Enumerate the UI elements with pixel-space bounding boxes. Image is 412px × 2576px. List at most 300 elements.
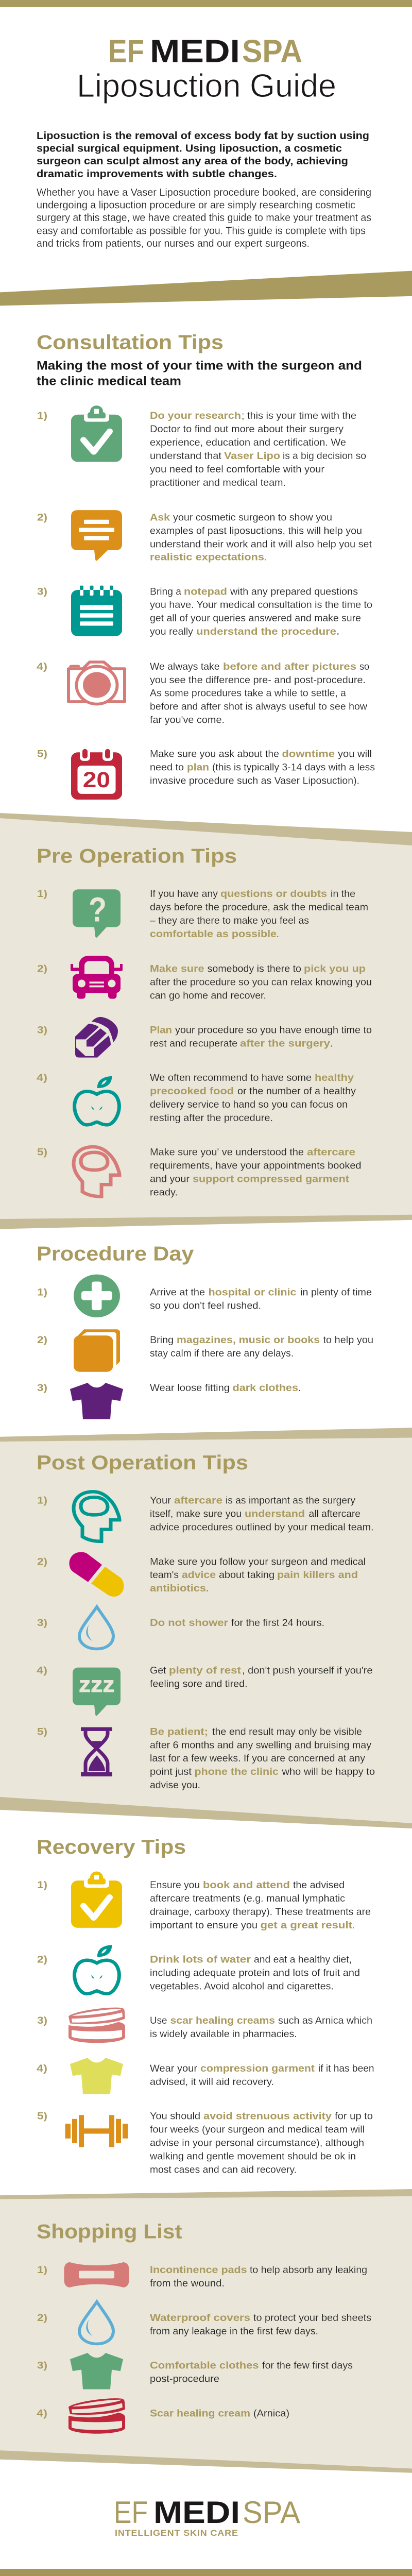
- item 3: dark clothes: [37, 1382, 301, 1419]
- icon: purple t-shirt: [70, 1383, 123, 1419]
- text: you see the difference pre- and post-procedure.: [150, 674, 366, 686]
- text: Get: [150, 1665, 166, 1676]
- logo: EF MediSpa: SPA: [242, 33, 302, 69]
- item 2: pain killers: 2): [37, 1556, 47, 1567]
- text: [150, 1335, 373, 1359]
- text: (this is typically 3-14 days with a less: [212, 762, 375, 773]
- footer logo: SPA: [243, 2495, 300, 2530]
- text: vegetables. Avoid alcohol and cigarettes.: [150, 1981, 334, 1992]
- text: ; this is your time with the: [242, 411, 356, 421]
- text: Make sure you ask about the: [150, 749, 279, 759]
- text: somebody is there to: [207, 963, 301, 975]
- text: [150, 1287, 372, 1311]
- text: [150, 411, 366, 488]
- item 2: ask: 2): [37, 512, 47, 523]
- text: pick you up: [304, 963, 366, 975]
- item 5: be patient: 5): [37, 1726, 47, 1737]
- item 1: book and attend: 1): [37, 1880, 47, 1891]
- icon: pill: [70, 1552, 124, 1597]
- heading: shopping list: Shopping List: [37, 2220, 182, 2243]
- icon: sleep bubble: zzz: [79, 1672, 115, 1697]
- icon: hourglass: [81, 1727, 112, 1776]
- icon: book: [74, 1329, 120, 1372]
- item 4: scar healing cream: 4): [37, 2408, 47, 2419]
- item 1: book and attend: [37, 1871, 371, 1931]
- heading: consultation tips: Consultation Tips: [37, 331, 224, 353]
- text: .: [330, 1038, 333, 1049]
- text: [150, 889, 368, 940]
- top bar: [0, 0, 412, 7]
- icon: red cream jar: [68, 2398, 125, 2434]
- text: post-procedure: [150, 2374, 219, 2384]
- text: Be patient;: [150, 1726, 208, 1737]
- text: get all of your queries answered and make sure: [150, 613, 361, 624]
- text: avoid strenuous activity: [203, 2111, 332, 2122]
- intro: body paragraph: and tricks from patients, our nurses and our expert surgeons.: [37, 238, 310, 249]
- item 2: magazines: 2): [37, 1335, 47, 1346]
- footer logo: MEDI: [153, 2495, 240, 2530]
- heading: procedure day: Procedure Day: [37, 1242, 194, 1265]
- text: [150, 1556, 366, 1594]
- text: about taking: [219, 1570, 274, 1581]
- text: Bring a: [150, 586, 181, 597]
- text: examples of past liposuctions, this will help you: [150, 526, 362, 536]
- intro: bold summary: Liposuction is the removal of excess body fat by suction using: [37, 130, 369, 142]
- text: understand: [245, 1509, 305, 1519]
- text: [150, 2015, 372, 2040]
- text: [150, 1880, 371, 1931]
- item 2: waterproof covers: 2): [37, 2313, 47, 2324]
- text: notepad: [184, 586, 227, 597]
- item 3: scar healing creams: 3): [37, 2015, 47, 2026]
- text: dark clothes: [233, 1382, 298, 1394]
- text: advised, it will aid recovery.: [150, 2077, 274, 2088]
- text: in the: [331, 889, 355, 900]
- text: .: [206, 1583, 209, 1594]
- item 1: questions or doubts: 1): [37, 889, 47, 900]
- text: Waterproof covers: [150, 2313, 250, 2324]
- item 1: incontinence pads: [37, 2262, 367, 2289]
- text: ready.: [150, 1187, 178, 1198]
- text: If you have any: [150, 889, 218, 900]
- text: (Arnica): [253, 2408, 289, 2419]
- slanted band: [0, 1428, 412, 1442]
- text: your cosmetic surgeon to show you: [173, 512, 332, 523]
- text: Make sure: [150, 963, 204, 975]
- icon: dumbbell: [65, 2115, 128, 2147]
- text: As some procedures take a while to settle, a: [150, 688, 346, 699]
- text: Your: [150, 1495, 171, 1506]
- item 4: healthy precooked food: 4): [37, 1073, 47, 1083]
- text: experience, education and certification. We: [150, 437, 346, 448]
- text: practitioner and medical team.: [150, 478, 286, 488]
- text: all aftercare: [309, 1509, 360, 1519]
- tagline: INTELLIGENT SKIN CARE: [115, 2528, 238, 2538]
- text: plenty of rest: [169, 1665, 241, 1676]
- text: drainage, carboxy therapy). These treatments are: [150, 1907, 371, 1918]
- text: Do your research: [150, 411, 241, 421]
- text: [150, 1665, 373, 1689]
- text: Wear your: [150, 2063, 197, 2074]
- text: advice: [182, 1570, 216, 1581]
- item 2: drink lots of water: [37, 1945, 360, 1994]
- text: you need to feel comfortable with your: [150, 464, 324, 475]
- text: Wear loose fitting: [150, 1382, 230, 1394]
- text: before and after shot is always useful to see how: [150, 701, 368, 713]
- item 2: pick you up: [37, 956, 372, 1001]
- panel: post operation tips: [37, 1451, 375, 1791]
- text: after the procedure so you can relax knowing you: [150, 977, 372, 988]
- item 5: aftercare requirements: 5): [37, 1147, 47, 1158]
- item 3: scar healing creams: [37, 2008, 372, 2043]
- text: if it has been: [318, 2063, 374, 2074]
- item 2: ask: [37, 510, 372, 563]
- subheading: Making the most of your time with the surgeon and: [37, 359, 362, 372]
- text: after the surgery: [240, 1038, 330, 1049]
- text: questions or doubts: [220, 889, 327, 900]
- item 1: do your research: 1): [37, 411, 47, 421]
- logo: EF MediSpa: EF: [108, 33, 144, 69]
- icon: teal notepad: [71, 586, 122, 636]
- text: downtime: [282, 749, 335, 759]
- item 3: notepad: [37, 586, 372, 637]
- beige background: post operation: [0, 1438, 412, 1823]
- text: you have. Your medical consultation is the time to: [150, 600, 372, 611]
- icon: question bubble: ?: [89, 890, 107, 929]
- text: important to ensure you: [150, 1920, 258, 1931]
- icon: calendar: 20: [83, 768, 110, 792]
- icon: apple: [75, 1076, 119, 1125]
- logo: EF MediSpa: [108, 33, 302, 69]
- text: to help absorb any leaking: [250, 2265, 367, 2276]
- text: compression garment: [200, 2063, 315, 2074]
- icon: head: [74, 1147, 119, 1196]
- panel: pre operation tips: [37, 844, 372, 1198]
- item 3: plan: [37, 1017, 372, 1058]
- text: [150, 661, 369, 725]
- item 3: comfortable clothes: 3): [37, 2360, 47, 2371]
- text: Make sure you' ve understood the: [150, 1147, 304, 1158]
- text: is a big decision so: [283, 451, 366, 462]
- bottom bar: [0, 2569, 412, 2576]
- text: and eat a healthy diet,: [254, 1954, 352, 1965]
- icon: orange speech bubble: [71, 510, 122, 561]
- text: delivery service to hand so you can focus on: [150, 1099, 348, 1110]
- icon: cream jar: [68, 2008, 125, 2043]
- text: last for a few weeks. If you are concerned at any: [150, 1753, 365, 1764]
- item 5: downtime: 5): [37, 749, 47, 759]
- icon: medical cross: [74, 1275, 120, 1317]
- intro: body paragraph: [37, 187, 371, 249]
- text: for up to: [335, 2111, 373, 2122]
- item 5: downtime: [37, 749, 375, 800]
- item 5: avoid strenuous activity: 5): [37, 2111, 47, 2122]
- text: days before the procedure, ask the medical team: [150, 902, 368, 913]
- text: Bring: [150, 1335, 174, 1346]
- item 1: aftercare: [37, 1492, 374, 1541]
- text: , don't push yourself if you're: [242, 1665, 373, 1676]
- text: understand the procedure.: [196, 626, 339, 637]
- panel: consultation tips: [37, 331, 375, 800]
- text: precooked food: [150, 1086, 234, 1097]
- text: .: [298, 1382, 301, 1394]
- item 3: comfortable clothes: [37, 2353, 353, 2389]
- beige background: shopping list: [0, 2196, 412, 2468]
- text: advice procedures outlined by your medical team.: [150, 1522, 374, 1533]
- text: Drink lots of water: [150, 1954, 251, 1965]
- text: [150, 1726, 375, 1791]
- text: [150, 1954, 360, 1992]
- text: [150, 2265, 367, 2289]
- item 2: pain killers: [37, 1552, 366, 1597]
- text: from the wound.: [150, 2278, 225, 2289]
- text: Comfortable clothes: [150, 2360, 259, 2371]
- text: [150, 1495, 374, 1533]
- intro: body paragraph: surgery at this stage, we have created this guide to make your treatment as: [37, 212, 371, 224]
- text: understand their work and it will also help you set: [150, 539, 372, 550]
- text: Plan: [150, 1025, 172, 1036]
- text: We always take: [150, 661, 220, 672]
- item 4: healthy precooked food: [37, 1073, 356, 1125]
- text: hospital or clinic: [209, 1287, 297, 1298]
- text: You should: [150, 2111, 200, 2122]
- logo: EF MediSpa: MEDI: [150, 33, 240, 69]
- icon: car: [71, 956, 123, 999]
- text: Use: [150, 2015, 167, 2026]
- text: [150, 1618, 324, 1629]
- intro: bold summary: surgeon can sculpt almost any area of the body, achieving: [37, 156, 348, 167]
- text: realistic expectations: [150, 552, 264, 563]
- beige background: pre operation and procedure separator: [0, 818, 412, 1219]
- text: [150, 586, 372, 637]
- item 3: do not shower: [37, 1607, 324, 1649]
- icon: green clipboard: [71, 405, 122, 462]
- text: can go home and recover.: [150, 990, 266, 1001]
- item 2: pick you up: 2): [37, 963, 47, 975]
- item 1: hospital or clinic: [37, 1275, 372, 1317]
- item 5: aftercare requirements: [37, 1147, 362, 1198]
- text: Ask: [150, 512, 170, 523]
- text: with any prepared questions: [230, 586, 358, 597]
- footer logo: EF: [114, 2495, 148, 2530]
- text: phone the clinic: [195, 1767, 279, 1777]
- heading: post operation tips: Post Operation Tips: [37, 1451, 248, 1473]
- text: antibiotics: [150, 1583, 206, 1594]
- item 1: do your research: [37, 405, 366, 488]
- text: point just: [150, 1767, 192, 1777]
- text: most cases and can aid recovery.: [150, 2164, 297, 2175]
- text: [150, 963, 372, 1001]
- slanted band: [0, 2189, 412, 2199]
- intro: bold summary: dramatic improvements with subtle changes.: [37, 168, 277, 180]
- slanted band: [0, 1797, 412, 1828]
- intro: bold summary: special surgical equipment. Using liposuction, a cosmetic: [37, 143, 342, 154]
- item 5: avoid strenuous activity: [37, 2111, 373, 2175]
- footer logo: [114, 2495, 300, 2538]
- panel: recovery tips: [37, 1836, 374, 2175]
- text: invasive procedure such as Vaser Liposuction).: [150, 775, 359, 786]
- text: for the few first days: [262, 2360, 353, 2371]
- intro: body paragraph: easy and comfortable as possible for you. This guide is complete with tips: [37, 225, 366, 236]
- text: [150, 1073, 356, 1124]
- item 5: be patient: [37, 1726, 375, 1791]
- text: [150, 2408, 289, 2419]
- text: so: [359, 661, 369, 672]
- text: you will: [338, 749, 372, 759]
- text: or the number of a healthy: [237, 1086, 356, 1097]
- item 1: aftercare: 1): [37, 1495, 47, 1506]
- text: four weeks (your surgeon and medical team will: [150, 2124, 365, 2135]
- text: Incontinence pads: [150, 2265, 247, 2276]
- item 4: compression garment: 4): [37, 2063, 47, 2074]
- text: comfortable as possible: [150, 929, 277, 940]
- text: the end result may only be visible: [212, 1726, 362, 1737]
- item 3: do not shower: 3): [37, 1618, 47, 1629]
- text: [150, 1025, 372, 1049]
- text: to help you: [323, 1335, 373, 1346]
- text: rest and recuperate: [150, 1038, 237, 1049]
- text: for the first 24 hours.: [231, 1618, 324, 1629]
- text: aftercare: [307, 1147, 355, 1158]
- icon: yellow t-shirt: [70, 2058, 123, 2094]
- text: Doctor to find out more about their surgery: [150, 424, 344, 435]
- slanted band: [0, 2450, 412, 2473]
- item 1: hospital or clinic: 1): [37, 1287, 47, 1298]
- slanted gold band: [0, 271, 412, 306]
- intro: bold summary: [37, 130, 369, 180]
- text: magazines, music or books: [177, 1335, 320, 1346]
- item 1: questions or doubts: [37, 889, 368, 940]
- text: requirements, have your appointments booked: [150, 1160, 361, 1171]
- text: before and after pictures: [223, 661, 356, 672]
- heading: recovery tips: Recovery Tips: [37, 1836, 186, 1858]
- icon: calendar: [71, 749, 122, 800]
- icon: pencil: [75, 1017, 118, 1058]
- slanted band: [0, 813, 412, 845]
- text: – they are there to make you feel as: [150, 916, 309, 926]
- icon: sleep bubble: [73, 1668, 121, 1716]
- text: support compressed garment: [193, 1174, 349, 1184]
- text: understand that: [150, 451, 222, 462]
- text: Do not shower: [150, 1618, 228, 1629]
- text: [149, 2111, 373, 2175]
- text: aftercare treatments (e.g. manual lymphatic: [150, 1893, 345, 1904]
- panel: procedure day: [37, 1242, 373, 1419]
- text: feeling sore and tired.: [150, 1679, 248, 1689]
- text: advise in your personal circumstance), although: [150, 2138, 364, 2148]
- icon: pad: [64, 2262, 129, 2287]
- text: .: [264, 552, 266, 563]
- item 4: plenty of rest: [37, 1665, 373, 1716]
- text: walking and gentle movement should be ok in: [149, 2151, 356, 2162]
- title: Liposuction Guide: [77, 67, 336, 104]
- text: We often recommend to have some: [150, 1073, 312, 1083]
- text: [150, 749, 375, 786]
- text: need to: [150, 762, 184, 773]
- icon: water drop: [79, 1607, 113, 1649]
- text: scar healing creams: [170, 2015, 275, 2026]
- text: after 6 months and any swelling and bruising may: [150, 1740, 371, 1751]
- panel: shopping list: [37, 2220, 371, 2434]
- text: such as Arnica which: [278, 2015, 372, 2026]
- item 2: drink lots of water: 2): [37, 1954, 47, 1965]
- text: you really: [150, 626, 193, 637]
- icon: water drop: [79, 2302, 113, 2344]
- text: aftercare: [174, 1495, 222, 1506]
- text: get a great result: [261, 1920, 352, 1931]
- text: advise you.: [150, 1780, 200, 1791]
- text: .: [277, 929, 279, 940]
- text: healthy: [315, 1073, 354, 1083]
- text: plan: [187, 762, 209, 773]
- text: to protect your bed sheets: [253, 2313, 371, 2324]
- text: your procedure so you have enough time to: [175, 1025, 372, 1036]
- item 2: magazines: [37, 1329, 373, 1372]
- item 2: waterproof covers: [37, 2302, 371, 2344]
- text: in plenty of time: [300, 1287, 372, 1298]
- subheading: [37, 359, 362, 388]
- icon: yellow clipboard: [71, 1871, 122, 1928]
- text: [150, 2360, 353, 2384]
- text: Arrive at the: [150, 1287, 205, 1298]
- text: Scar healing cream: [150, 2408, 250, 2419]
- text: Make sure you follow your surgeon and medical: [150, 1556, 366, 1567]
- text: [150, 2313, 371, 2337]
- text: itself, make sure you: [150, 1509, 242, 1519]
- text: team's: [150, 1570, 179, 1581]
- text: [150, 1382, 301, 1394]
- text: Ensure you: [150, 1880, 200, 1891]
- heading: pre operation tips: Pre Operation Tips: [37, 844, 237, 867]
- text: so you don't feel rushed.: [150, 1300, 261, 1311]
- item 3: notepad: 3): [37, 586, 47, 597]
- text: [150, 512, 372, 563]
- item 1: incontinence pads: 1): [37, 2265, 47, 2276]
- text: resting after the procedure.: [150, 1113, 273, 1124]
- text: is as important as the surgery: [226, 1495, 355, 1506]
- subheading: the clinic medical team: [37, 374, 181, 388]
- item 3: dark clothes: 3): [37, 1382, 47, 1394]
- text: stay calm if there are any delays.: [150, 1348, 294, 1359]
- text: and your: [150, 1174, 190, 1184]
- text: book and attend: [203, 1880, 290, 1891]
- text: Vaser Lipo: [224, 451, 280, 462]
- text: [150, 2063, 374, 2088]
- item 4: before and after pictures: 4): [37, 661, 47, 672]
- text: including adequate protein and lots of fruit and: [150, 1968, 360, 1978]
- icon: teal head: [74, 1492, 119, 1541]
- item 3: plan: 3): [37, 1025, 47, 1036]
- text: is widely available in pharmacies.: [150, 2029, 297, 2040]
- text: pain killers and: [277, 1570, 358, 1581]
- text: who will be happy to: [281, 1767, 375, 1777]
- icon: question bubble: [73, 889, 121, 938]
- text: the advised: [293, 1880, 345, 1891]
- slanted band: [0, 1215, 412, 1229]
- icon: green t-shirt: [70, 2353, 123, 2389]
- item 4: before and after pictures: [37, 661, 369, 725]
- intro: body paragraph: Whether you have a Vaser Liposuction procedure booked, are considering: [37, 187, 371, 198]
- item 4: plenty of rest: 4): [37, 1665, 47, 1676]
- intro: body paragraph: undergoing a liposuction procedure or are simply researching cosmetic: [37, 199, 355, 211]
- text: .: [352, 1920, 354, 1931]
- text: [150, 1147, 362, 1198]
- item 4: compression garment: [37, 2058, 374, 2094]
- text: from any leakage in the first few days.: [150, 2326, 318, 2337]
- item 4: scar healing cream: [37, 2398, 289, 2434]
- icon: apple: [75, 1945, 119, 1994]
- icon: camera: [68, 662, 125, 704]
